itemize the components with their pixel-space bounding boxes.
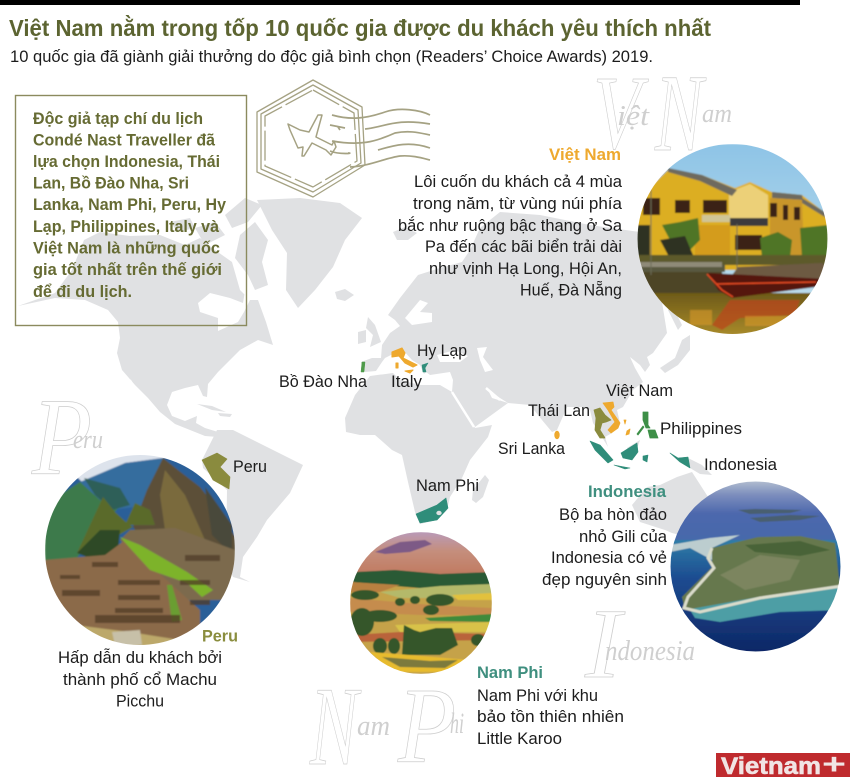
intro text: gia tốt nhất trên thế giới: [33, 261, 222, 279]
Hudson Bay: [198, 285, 254, 331]
intro panel: [16, 96, 246, 326]
country: Vietnam: [603, 402, 630, 435]
script label: Việt Nam: [593, 52, 732, 174]
intro text: để đi du lịch.: [33, 283, 132, 301]
script label: Peru: P: [31, 376, 92, 498]
airplane: [288, 115, 336, 156]
country: Greece: [422, 363, 428, 372]
heading: Nam Phi: Nam Phi: [477, 663, 543, 682]
country: Philippines: [637, 412, 658, 438]
script label: Việt Nam: V: [593, 54, 649, 171]
top black bar: [0, 0, 800, 5]
script label: Indonesia: [584, 588, 695, 699]
Australia and New Guinea: [627, 440, 712, 540]
intro text: lựa chọn Indonesia, Thái: [33, 153, 220, 171]
intro text: Lanka, Nam Phi, Peru, Hy: [33, 196, 227, 214]
text: Nam Phi description: Nam Phi với khu: [477, 687, 598, 705]
text: Indonesia description: [542, 506, 668, 589]
North America: [18, 232, 273, 437]
text: Việt Nam description: bắc như ruộng bậc thang ở Sa: [398, 216, 623, 235]
map label: Việt Nam: Việt Nam: [606, 382, 673, 400]
dock: [637, 265, 725, 272]
intro text: Lan, Bồ Đào Nha, Sri: [33, 174, 189, 192]
photo: Machu Picchu, Peru: [45, 450, 235, 650]
script label: Việt Nam: N: [654, 52, 707, 174]
intro text: Condé Nast Traveller đã: [33, 132, 216, 150]
script label: Nam Phi: am: [357, 711, 390, 742]
South America: [202, 430, 303, 582]
text: Việt Nam description: Pa đến các bãi biển trải dài: [425, 238, 622, 256]
text: Việt Nam description: [398, 173, 623, 300]
Eurasia: [361, 212, 720, 447]
text: Nam Phi description: [477, 687, 624, 748]
heading: Indonesia: Indonesia: [588, 482, 667, 501]
text: Peru description: Hấp dẫn du khách bởi: [58, 648, 222, 667]
text: Nam Phi description: bảo tồn thiên nhiên: [477, 708, 624, 726]
logo: Vietnam+: [716, 749, 850, 780]
logo: Vietnam+: Vietnam: [721, 753, 821, 780]
country: Sri Lanka: [554, 431, 560, 439]
Africa: [345, 373, 492, 524]
world map: [18, 198, 720, 582]
Madagascar: [472, 475, 489, 503]
hexagon rings: [257, 80, 365, 197]
text: Peru description: [58, 648, 222, 710]
script label: Việt Nam: iệt: [617, 101, 650, 132]
text: Indonesia description: nhỏ Gili của: [579, 528, 668, 546]
country: Italy: [392, 348, 417, 373]
country: South Africa: [416, 498, 448, 523]
Japan and Far East islands: [660, 305, 690, 373]
text: Indonesia description: Bộ ba hòn đảo: [559, 506, 667, 524]
river: [654, 292, 811, 334]
boat: [730, 263, 828, 280]
text: Việt Nam description: Huế, Đà Nẵng: [520, 280, 622, 300]
trees: [695, 225, 730, 255]
intro text: [33, 110, 227, 301]
Greenland: [257, 198, 362, 308]
map label: Philippines: Philippines: [660, 420, 742, 438]
script label: Peru: eru: [73, 425, 103, 454]
script label: Nam Phi: [309, 665, 464, 780]
photo: Little Karoo, Nam Phi: [350, 532, 492, 674]
map label: Indonesia: Indonesia: [704, 456, 778, 474]
subtitle: 10 quốc gia đã giành giải thưởng do độc giả bình chọn (Readers’ Choice Awards) 2019.: [10, 48, 653, 66]
walls: [637, 170, 828, 270]
map label: Bồ Đào Nha: Bồ Đào Nha: [279, 373, 368, 391]
ruin blocks: [60, 555, 220, 623]
arctic islands of Eurasia: [393, 227, 417, 240]
heading: Peru: Peru: [202, 626, 238, 646]
script label: Indonesia: ndonesia: [605, 636, 695, 667]
windows: [643, 198, 800, 250]
intro text: Việt Nam là những quốc: [33, 240, 220, 258]
country: Indonesia: [590, 441, 690, 469]
map label: Nam Phi: Nam Phi: [416, 477, 479, 495]
text: Indonesia description: đẹp nguyên sinh: [542, 571, 667, 589]
island: [682, 536, 840, 610]
text: Peru description: thành phố cổ Machu: [63, 671, 217, 689]
postmark wavy lines: [332, 109, 430, 118]
script label: Việt Nam: am: [702, 99, 732, 128]
map label: Italy: Italy: [391, 373, 423, 391]
country: Thailand: [594, 408, 611, 438]
inland seas: [437, 347, 493, 372]
Iceland: [335, 289, 354, 301]
postmark stamp: [257, 80, 430, 197]
Great Britain and Ireland: [358, 317, 381, 347]
photo: Hội An, Việt Nam: [637, 144, 830, 335]
photo: Gili islands, Indonesia: [670, 481, 842, 652]
text: Nam Phi description: Little Karoo: [477, 730, 562, 748]
heading: Việt Nam: Việt Nam: [549, 145, 621, 164]
text: Việt Nam description: Lôi cuốn du khách cả 4 mùa: [414, 173, 623, 191]
text: Peru description: Picchu: [116, 692, 164, 710]
tree clumps: [350, 590, 485, 655]
country: Peru: [202, 453, 230, 489]
text: Indonesia description: Indonesia có vẻ: [551, 549, 667, 567]
map label: Peru: Peru: [233, 458, 267, 476]
Baltic Sea: [405, 300, 432, 325]
script label: Nam Phi: hi: [450, 707, 464, 740]
country: Portugal: [361, 362, 365, 372]
script label: Indonesia: I: [584, 588, 626, 699]
map label: Thái Lan: Thái Lan: [528, 402, 590, 420]
text: Việt Nam description: trong năm, từ vùng núi phía: [413, 195, 623, 213]
intro text: Lạp, Philippines, Italy và: [33, 218, 220, 236]
Caribbean islands and Baja: [130, 380, 143, 402]
Arctic islands: [170, 198, 268, 290]
map label: Hy Lạp: Hy Lạp: [417, 342, 467, 360]
text: Việt Nam description: như vịnh Hạ Long, Hội An,: [429, 260, 622, 278]
map label: Sri Lanka: Sri Lanka: [498, 440, 566, 458]
title: Việt Nam nằm trong tốp 10 quốc gia được du khách yêu thích nhất: [9, 14, 711, 41]
intro text: Độc giả tạp chí du lịch: [33, 110, 203, 128]
